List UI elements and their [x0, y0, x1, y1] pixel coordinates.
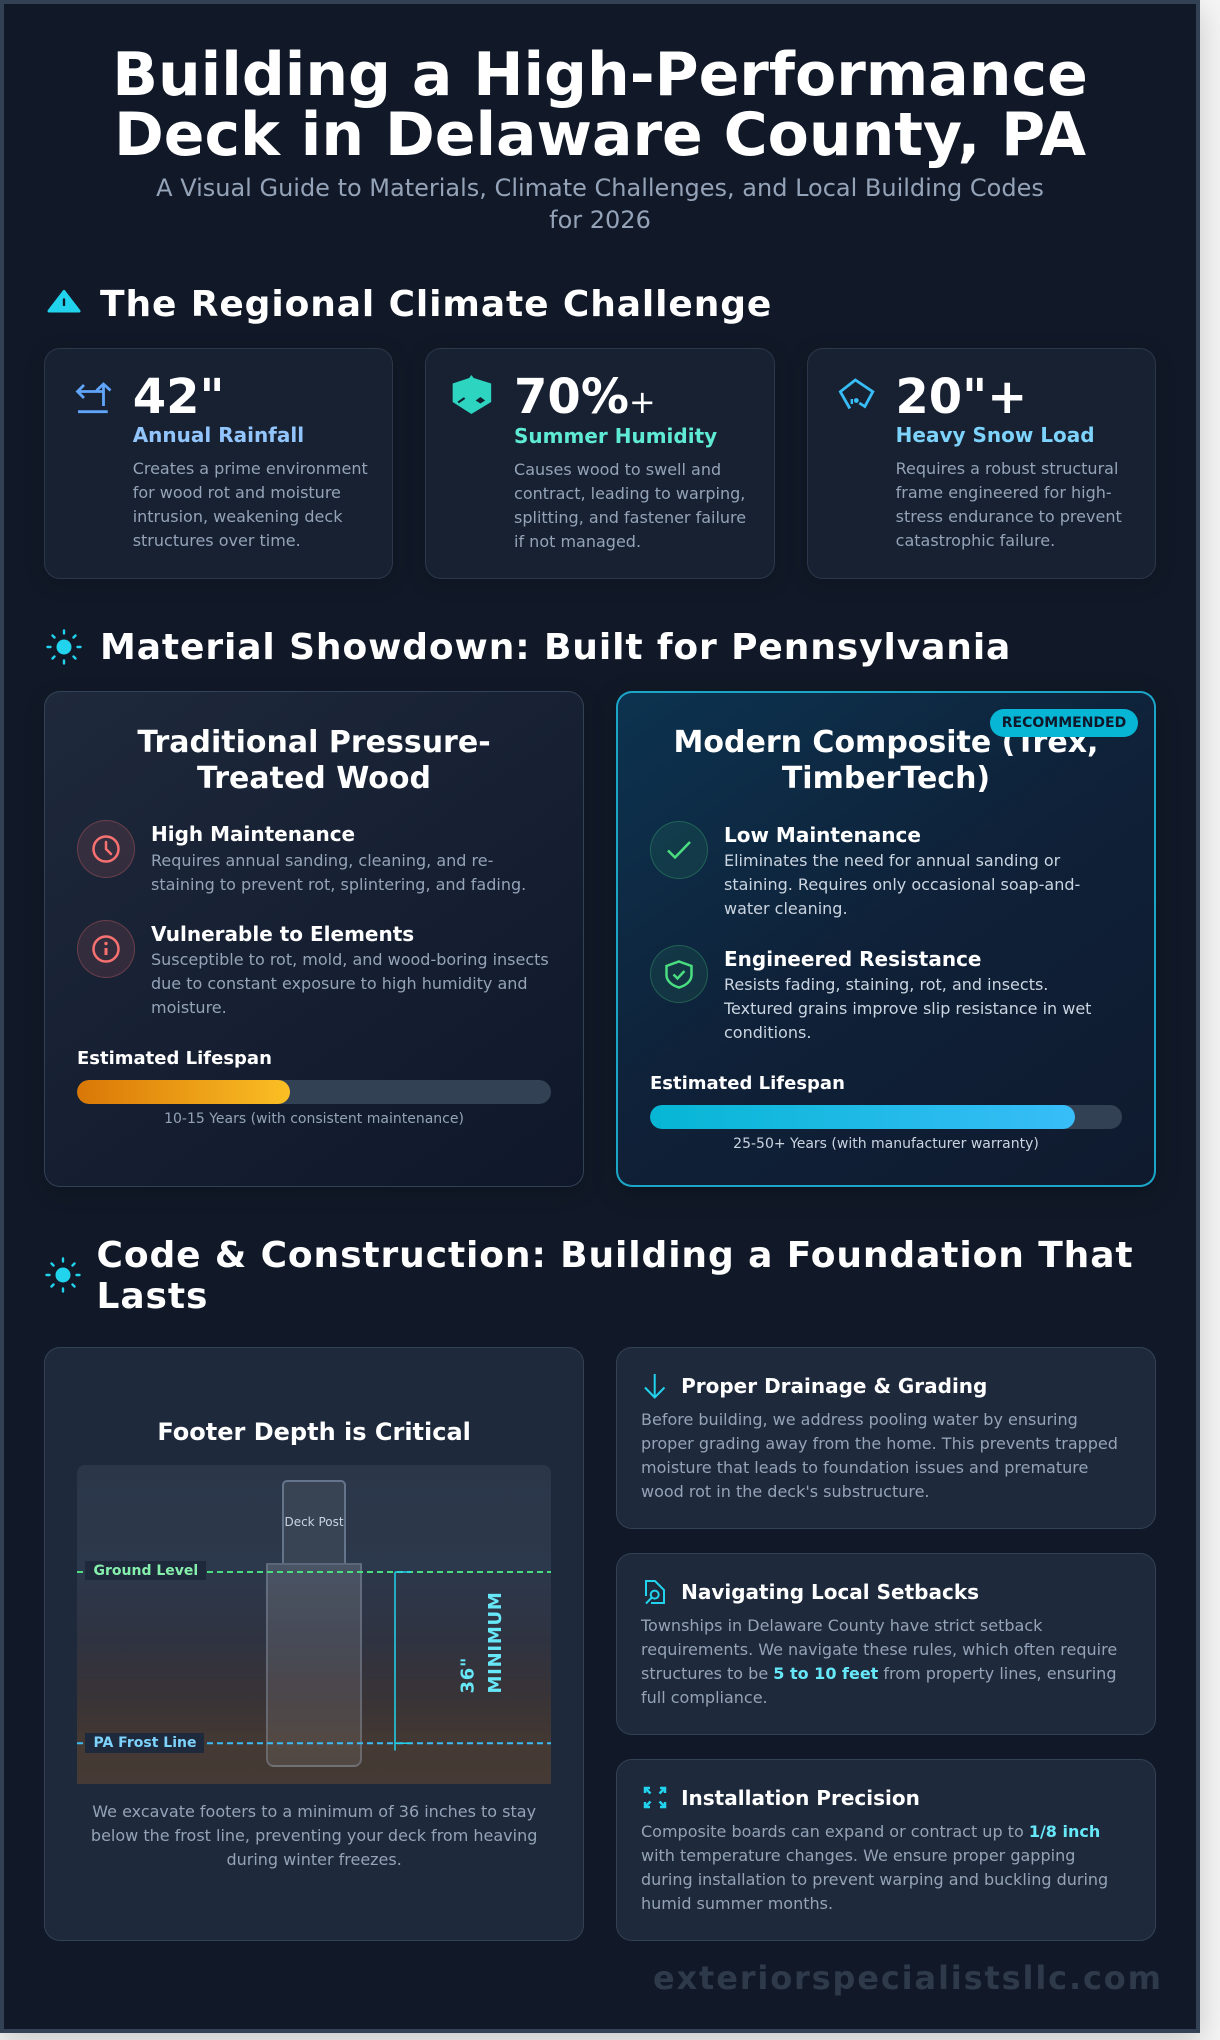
depth lines: MINIMUM: [485, 1591, 506, 1693]
feature description: Resists fading, staining, rot, and insects.: [724, 974, 1048, 994]
footer depth diagram: [77, 1464, 551, 1784]
icon: snow house: [838, 378, 875, 410]
heading: code and construction: [96, 1235, 1134, 1316]
deck post: Deck Post: [284, 1515, 344, 1529]
icon: down arrow: [644, 1374, 666, 1399]
concrete footer: [266, 1562, 362, 1767]
feature description: Textured grains improve slip resistance in wet: [724, 998, 1091, 1018]
card text: [641, 1822, 1108, 1912]
stat description: if not managed.: [514, 532, 641, 550]
card text: proper grading away from the home. This prevents trapped: [641, 1434, 1118, 1452]
icon: shield: [650, 945, 708, 1003]
feature heading: High Maintenance: [151, 822, 355, 846]
recommended badge: [990, 709, 1138, 737]
icon: document search: [645, 1580, 665, 1604]
icon: clock: [77, 820, 135, 878]
feature description: Susceptible to rot, mold, and wood-boring insects: [151, 950, 549, 968]
card heading: Proper Drainage & Grading: [681, 1374, 987, 1398]
card text: Before building, we address pooling water by ensuring: [641, 1410, 1078, 1428]
panel title: Treated Wood: [197, 761, 431, 796]
heading: code and construction: Lasts: [96, 1276, 208, 1316]
panel title: Modern Composite (Trex,: [674, 725, 1098, 760]
stat value: 70%+: [514, 369, 656, 425]
heading: code and construction: Code & Construction: Building a Foundation That: [96, 1235, 1134, 1276]
panel: heavy snow load: [807, 348, 1156, 579]
stat label: Summer Humidity: [514, 424, 717, 448]
title: [112, 40, 1088, 170]
card text: wood rot in the deck's substructure.: [641, 1482, 930, 1500]
card text: full compliance.: [641, 1688, 768, 1706]
stat description: intrusion, weakening deck: [133, 506, 342, 526]
card text: moisture that leads to foundation issues and premature: [641, 1458, 1088, 1476]
subtitle: [156, 174, 1044, 234]
frost line label: [85, 1732, 204, 1753]
watermark: exteriorspecialistsllc.com: [653, 1959, 1163, 1997]
panel title: Traditional Pressure-: [137, 725, 491, 760]
feature heading: Engineered Resistance: [724, 947, 982, 971]
panel title: Footer Depth is Critical: [157, 1418, 471, 1446]
icon: humidity: [452, 375, 492, 414]
stat description: frame engineered for high-: [896, 482, 1112, 502]
stat description: Requires a robust structural: [896, 458, 1118, 478]
subtitle: for 2026: [549, 206, 651, 234]
stat label: Annual Rainfall: [133, 423, 304, 447]
stat description: Causes wood to swell and: [514, 460, 721, 478]
card text: Composite boards can expand or contract up to 1/8 inch: [641, 1822, 1100, 1840]
feature description: [151, 950, 549, 1016]
stat description: structures over time.: [133, 530, 301, 550]
card text: structures to be 5 to 10 feet from property lines, ensuring: [641, 1664, 1116, 1682]
feature description: water cleaning.: [724, 898, 848, 918]
depth lines: [77, 1571, 551, 1750]
icon: check: [650, 821, 708, 879]
panel: footer depth: [44, 1347, 584, 1941]
card text: [640, 1616, 1117, 1706]
panel: annual rainfall: [44, 348, 393, 579]
feature description: conditions.: [724, 1022, 811, 1042]
heading: regional climate challenge: The Regional Climate Challenge: [100, 284, 772, 324]
panel: drainage: [616, 1347, 1156, 1529]
deck post: [282, 1480, 346, 1563]
feature description: staining. Requires only occasional soap-and-: [724, 874, 1080, 894]
icon: expand arrows: [644, 1786, 666, 1808]
icon: rainfall arrows: [76, 382, 112, 414]
card text: Townships in Delaware County have strict setback: [641, 1616, 1042, 1634]
panel: setbacks: [616, 1553, 1156, 1735]
depth lines: 36": [458, 1656, 479, 1693]
stat description: for wood rot and moisture: [133, 482, 341, 502]
icon: sun: [45, 1257, 81, 1293]
stat description: catastrophic failure.: [896, 530, 1055, 550]
card text: humid summer months.: [641, 1894, 833, 1912]
card heading: Navigating Local Setbacks: [681, 1580, 979, 1604]
feature heading: Vulnerable to Elements: [151, 922, 414, 946]
panel title: TimberTech): [782, 761, 990, 796]
card text: during installation to prevent warping and buckling during: [641, 1870, 1108, 1888]
recommended badge: RECOMMENDED: [1002, 715, 1126, 731]
feature description: Requires annual sanding, cleaning, and re-: [151, 850, 493, 870]
feature description: [724, 974, 1091, 1042]
lifespan label: Estimated Lifespan: [650, 1073, 845, 1094]
stat description: Creates a prime environment: [133, 458, 368, 478]
card text: with temperature changes. We ensure proper gapping: [641, 1846, 1075, 1864]
lifespan bar: [77, 1080, 551, 1104]
feature description: moisture.: [151, 998, 227, 1016]
feature description: Eliminates the need for annual sanding or: [724, 850, 1060, 870]
stat description: [514, 460, 746, 550]
panel title: [674, 725, 1098, 796]
panel: pressure-treated wood: [44, 691, 584, 1187]
card text: requirements. We navigate these rules, which often require: [641, 1640, 1117, 1658]
feature description: [151, 850, 526, 894]
icon: warning triangle: [48, 290, 81, 312]
lifespan label: Estimated Lifespan: [77, 1048, 272, 1069]
card text: [641, 1410, 1118, 1500]
panel: summer humidity: [425, 348, 775, 579]
feature heading: Low Maintenance: [724, 823, 921, 847]
feature description: due to constant exposure to high humidity and: [151, 974, 528, 992]
footer description: We excavate footers to a minimum of 36 inches to stay: [92, 1802, 536, 1820]
panel: installation: [616, 1759, 1156, 1941]
ground level label: Ground Level: [94, 1562, 198, 1578]
stat description: [896, 458, 1122, 550]
card heading: Installation Precision: [681, 1786, 920, 1810]
footer description: during winter freezes.: [226, 1850, 402, 1868]
icon: sun: [46, 629, 82, 665]
lifespan caption: 10-15 Years (with consistent maintenance): [164, 1111, 464, 1127]
feature description: staining to prevent rot, splintering, and fading.: [151, 874, 526, 894]
footer description: [91, 1802, 537, 1868]
stat value: 42": [133, 369, 224, 425]
stat description: [133, 458, 368, 550]
heading: material showdown: Material Showdown: Built for Pennsylvania: [100, 626, 1011, 668]
panel title: [137, 725, 491, 796]
icon: info: [77, 920, 135, 978]
lifespan bar: [650, 1105, 1122, 1129]
stat description: splitting, and fastener failure: [514, 508, 746, 526]
stat description: contract, leading to warping,: [514, 484, 745, 502]
feature description: [724, 850, 1080, 918]
stat value: 20"+: [895, 369, 1027, 425]
title: Building a High-Performance: [112, 40, 1088, 110]
title: Deck in Delaware County, PA: [114, 100, 1086, 170]
stat label: Heavy Snow Load: [896, 423, 1095, 447]
panel: modern composite: [616, 691, 1156, 1187]
frost line label: PA Frost Line: [94, 1734, 196, 1750]
footer description: below the frost line, preventing your deck from heaving: [91, 1826, 537, 1844]
lifespan caption: 25-50+ Years (with manufacturer warranty): [733, 1136, 1039, 1152]
subtitle: A Visual Guide to Materials, Climate Challenges, and Local Building Codes: [156, 174, 1044, 202]
stat description: stress endurance to prevent: [896, 506, 1122, 526]
